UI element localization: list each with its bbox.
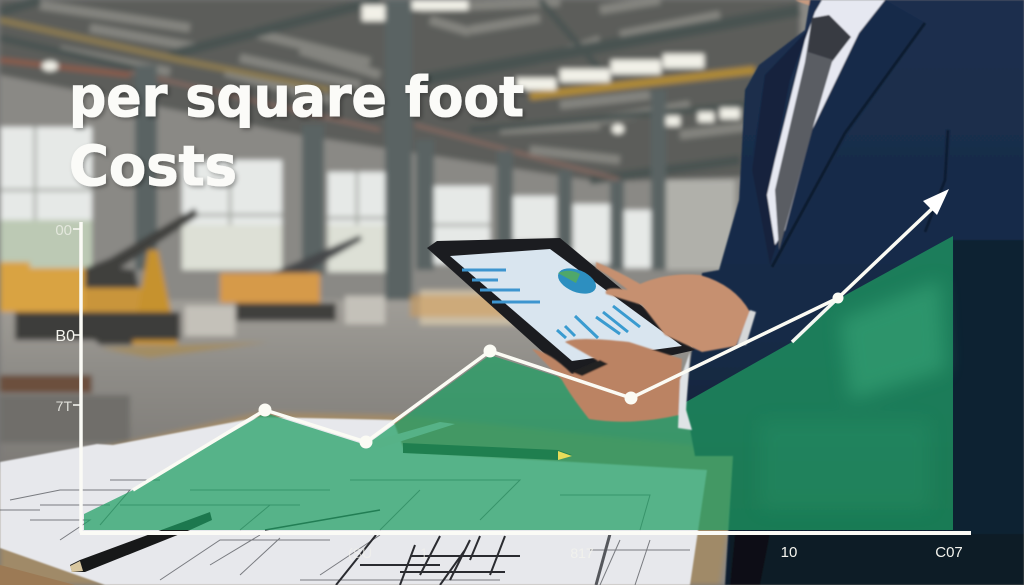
hands holding the tablet (532, 262, 756, 430)
sleeve folds under green (760, 280, 945, 510)
floor (0, 300, 720, 480)
x axis labels: (SU (348, 545, 372, 561)
x axis labels (348, 544, 963, 561)
pencil on table (370, 422, 572, 460)
green area chart fill (84, 236, 953, 530)
x axis labels: 817 (570, 545, 594, 561)
x axis labels: 1 (420, 545, 428, 561)
wood table (0, 412, 740, 585)
pencil tip (558, 451, 572, 460)
lapel shadow lines (772, 23, 925, 267)
y axis labels: 00 (55, 222, 72, 239)
right lapel (772, 0, 925, 267)
pencil black, foreground (70, 512, 212, 572)
y axis labels: 7T (56, 398, 72, 414)
y axis labels (55, 222, 75, 414)
person: suit, shirt and tie (685, 0, 1024, 585)
tablet with dashboard (427, 238, 695, 376)
title: per square foot (69, 65, 524, 129)
x axis labels: C07 (935, 544, 963, 561)
y axis labels: B0 (55, 328, 75, 345)
trend line with arrow (133, 189, 949, 490)
suit jacket (685, 0, 1024, 585)
windows (0, 127, 735, 272)
blueprints on the table (0, 417, 707, 585)
arrow head (923, 189, 949, 215)
yellow machine right (250, 235, 362, 282)
columns (135, 0, 666, 350)
title: Costs (69, 134, 237, 198)
y axis and x axis (73, 222, 971, 533)
title (69, 65, 524, 198)
yellow machine left (60, 208, 198, 345)
face chin (795, 0, 845, 7)
tie (775, 15, 851, 250)
data points (258, 292, 844, 448)
x axis labels: 10 (781, 544, 797, 561)
ceiling lights (42, 0, 740, 134)
shirt (767, 0, 885, 245)
left lapel (752, 30, 808, 265)
